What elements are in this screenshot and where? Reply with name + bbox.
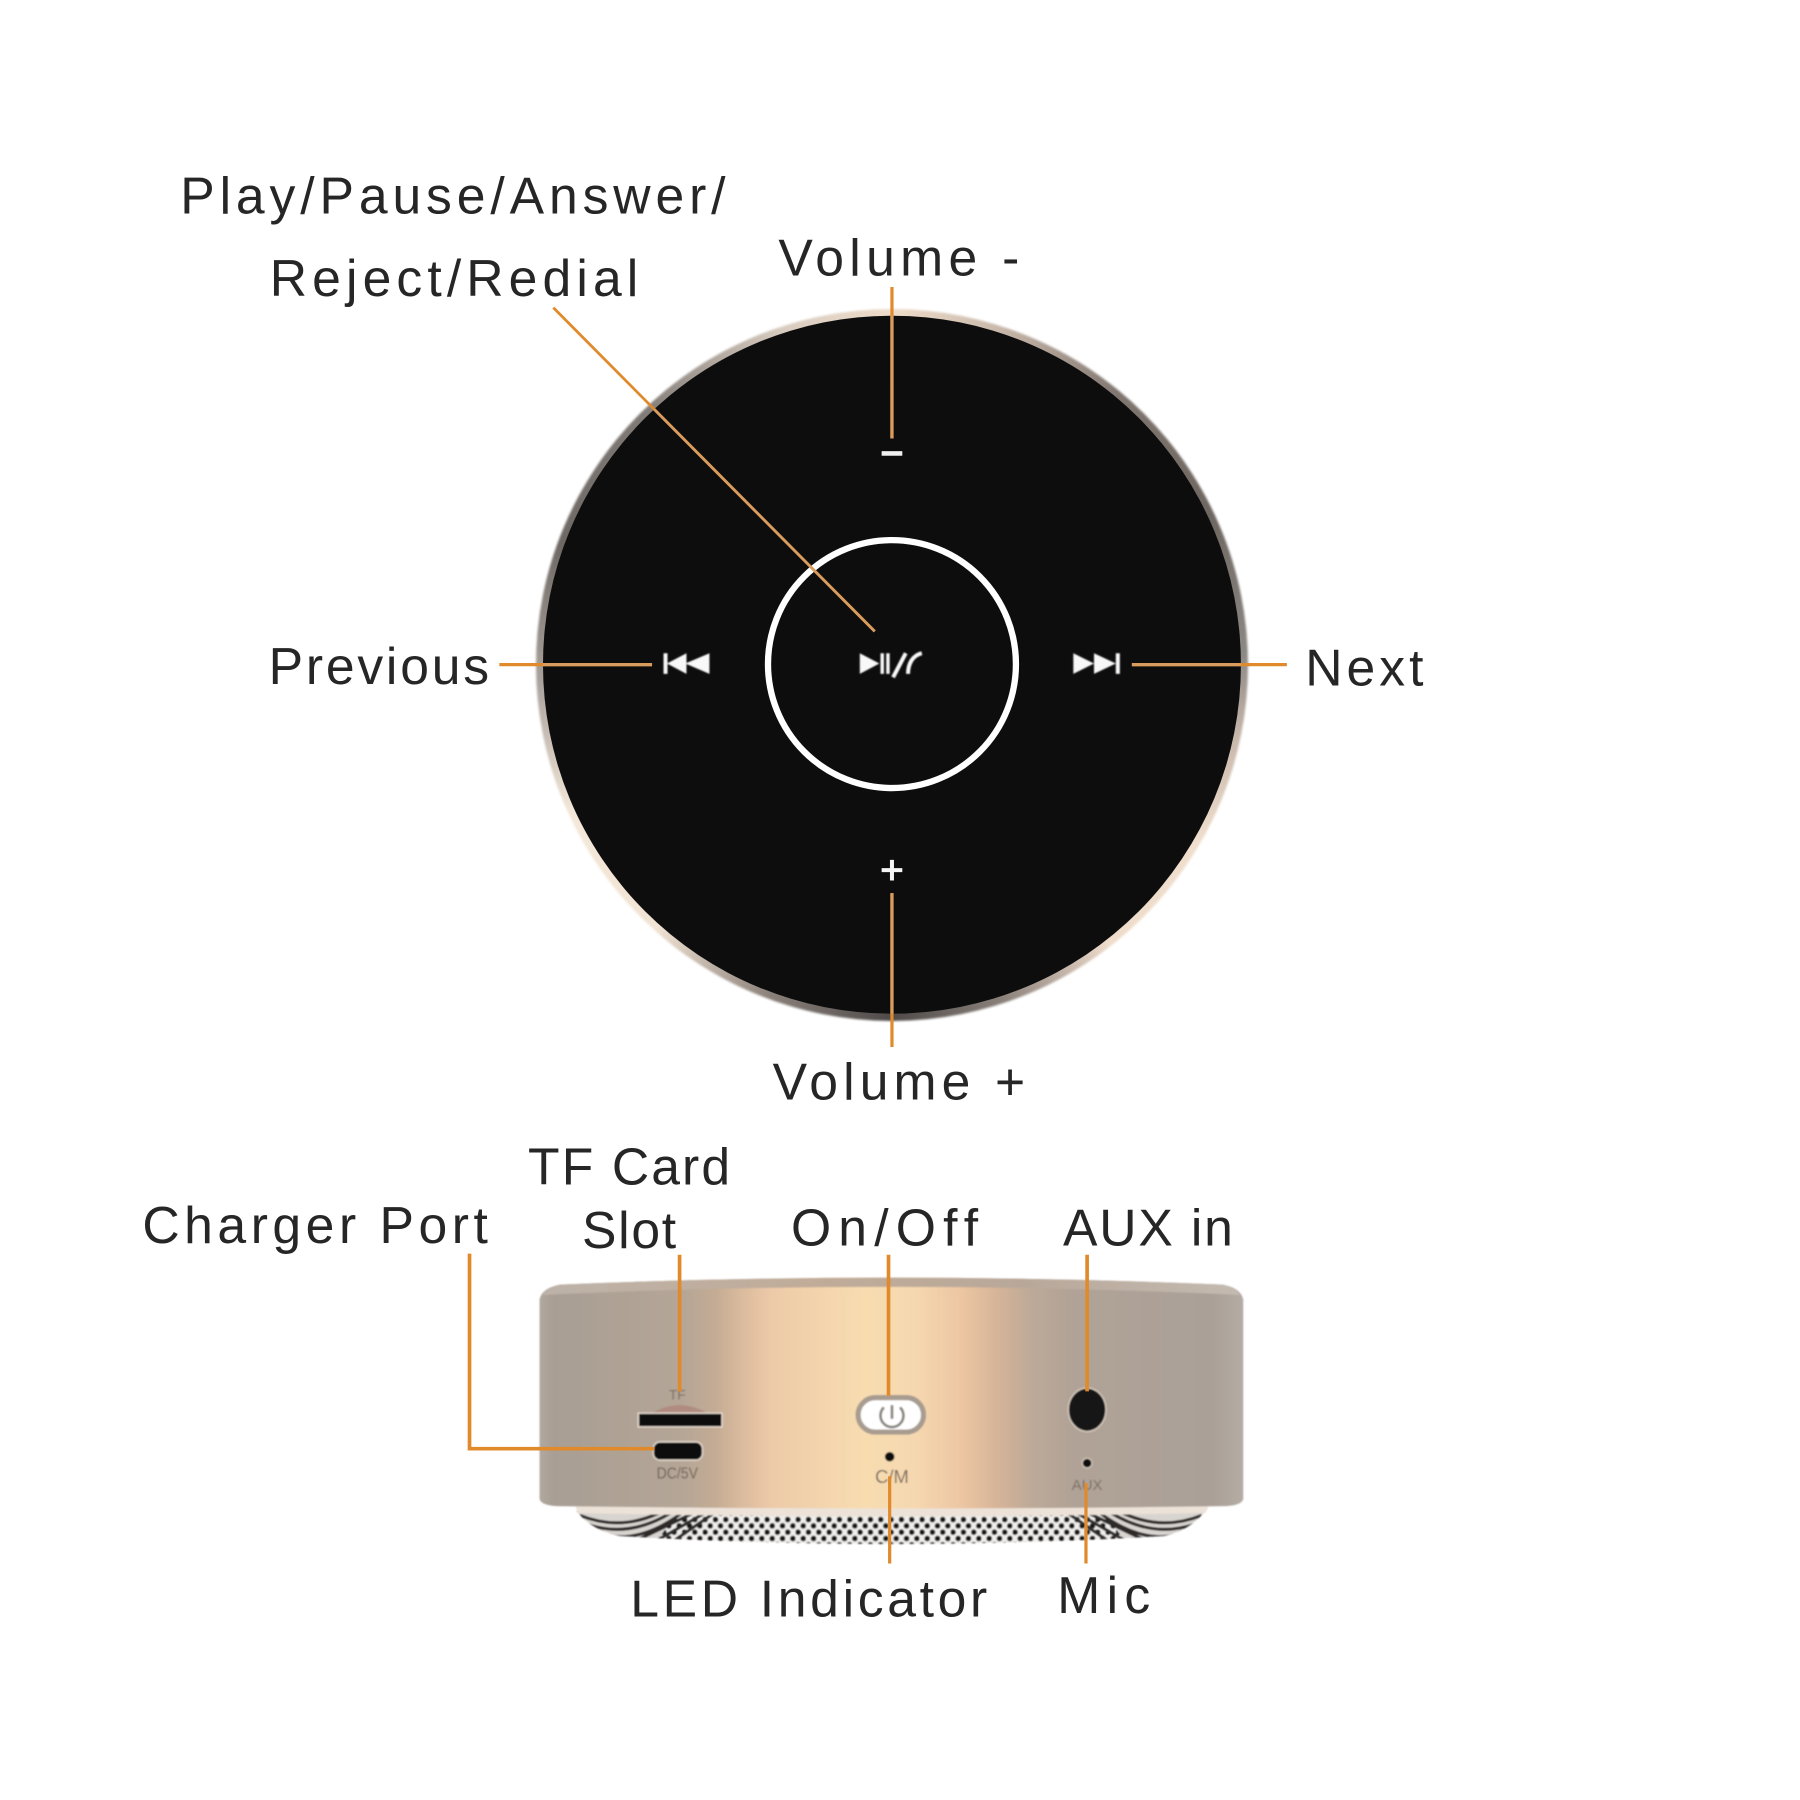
callout lines <box>470 287 1287 1564</box>
label: volume plus: Volume + <box>773 1053 1025 1111</box>
disc rim <box>536 308 1248 1020</box>
label: volume minus: Volume - <box>778 229 1019 287</box>
micro USB port <box>653 1442 703 1460</box>
label: TF card: TF Card <box>528 1138 730 1196</box>
label: play pause line 2: Reject/Redial <box>270 249 638 307</box>
panel: touch control disc <box>543 316 1241 1014</box>
label: aux in: AUX in <box>1063 1199 1233 1257</box>
label: previous: Previous <box>269 637 489 695</box>
TF label: TF <box>669 1387 686 1402</box>
mic dot <box>1082 1458 1092 1468</box>
black disc face <box>543 316 1241 1014</box>
icon: next <box>1073 653 1120 674</box>
arrow: on off <box>887 1255 890 1396</box>
label: slot: Slot <box>582 1201 676 1259</box>
top bevel <box>543 1278 1240 1295</box>
speaker grille <box>576 1510 1204 1546</box>
power button <box>858 1398 924 1432</box>
arrow: next <box>1132 663 1287 666</box>
label: mic: Mic <box>1057 1566 1150 1624</box>
arrow: mic <box>1085 1483 1087 1564</box>
DC/5V label: DC/5V <box>657 1465 698 1483</box>
panel: speaker side view <box>540 1278 1243 1554</box>
icon: plus <box>882 860 902 880</box>
arrow: volume plus <box>891 893 893 1047</box>
centre ring <box>768 540 1016 788</box>
On/M label: C/M <box>875 1466 909 1487</box>
grille right side <box>1068 1512 1203 1540</box>
bottom lip <box>572 1499 1212 1516</box>
label: play pause line 1: Play/Pause/Answer/ <box>180 167 726 225</box>
icon: previous <box>664 653 709 674</box>
label: charger port: Charger Port <box>142 1196 488 1254</box>
arrow: aux in <box>1086 1255 1089 1391</box>
TF card slot <box>638 1405 722 1427</box>
speaker body <box>540 1278 1243 1508</box>
arrow: previous <box>499 663 652 666</box>
arrow: LED <box>888 1476 891 1564</box>
arrow: TF slot <box>678 1255 681 1391</box>
arrow: charger port <box>470 1254 654 1449</box>
LED dot <box>885 1452 894 1462</box>
grille left side <box>576 1510 714 1540</box>
AUX jack <box>1068 1388 1106 1432</box>
icon: minus <box>882 451 902 456</box>
label: next: Next <box>1305 638 1423 696</box>
arrow: play pause <box>553 308 875 631</box>
callout line tint over disc <box>543 316 1241 1014</box>
icon: play pause phone <box>860 653 922 677</box>
arrow: volume minus <box>891 287 893 439</box>
label: on off: On/Off <box>791 1199 979 1257</box>
AUX label: AUX <box>1072 1477 1102 1494</box>
label: LED indicator: LED Indicator <box>630 1569 987 1627</box>
